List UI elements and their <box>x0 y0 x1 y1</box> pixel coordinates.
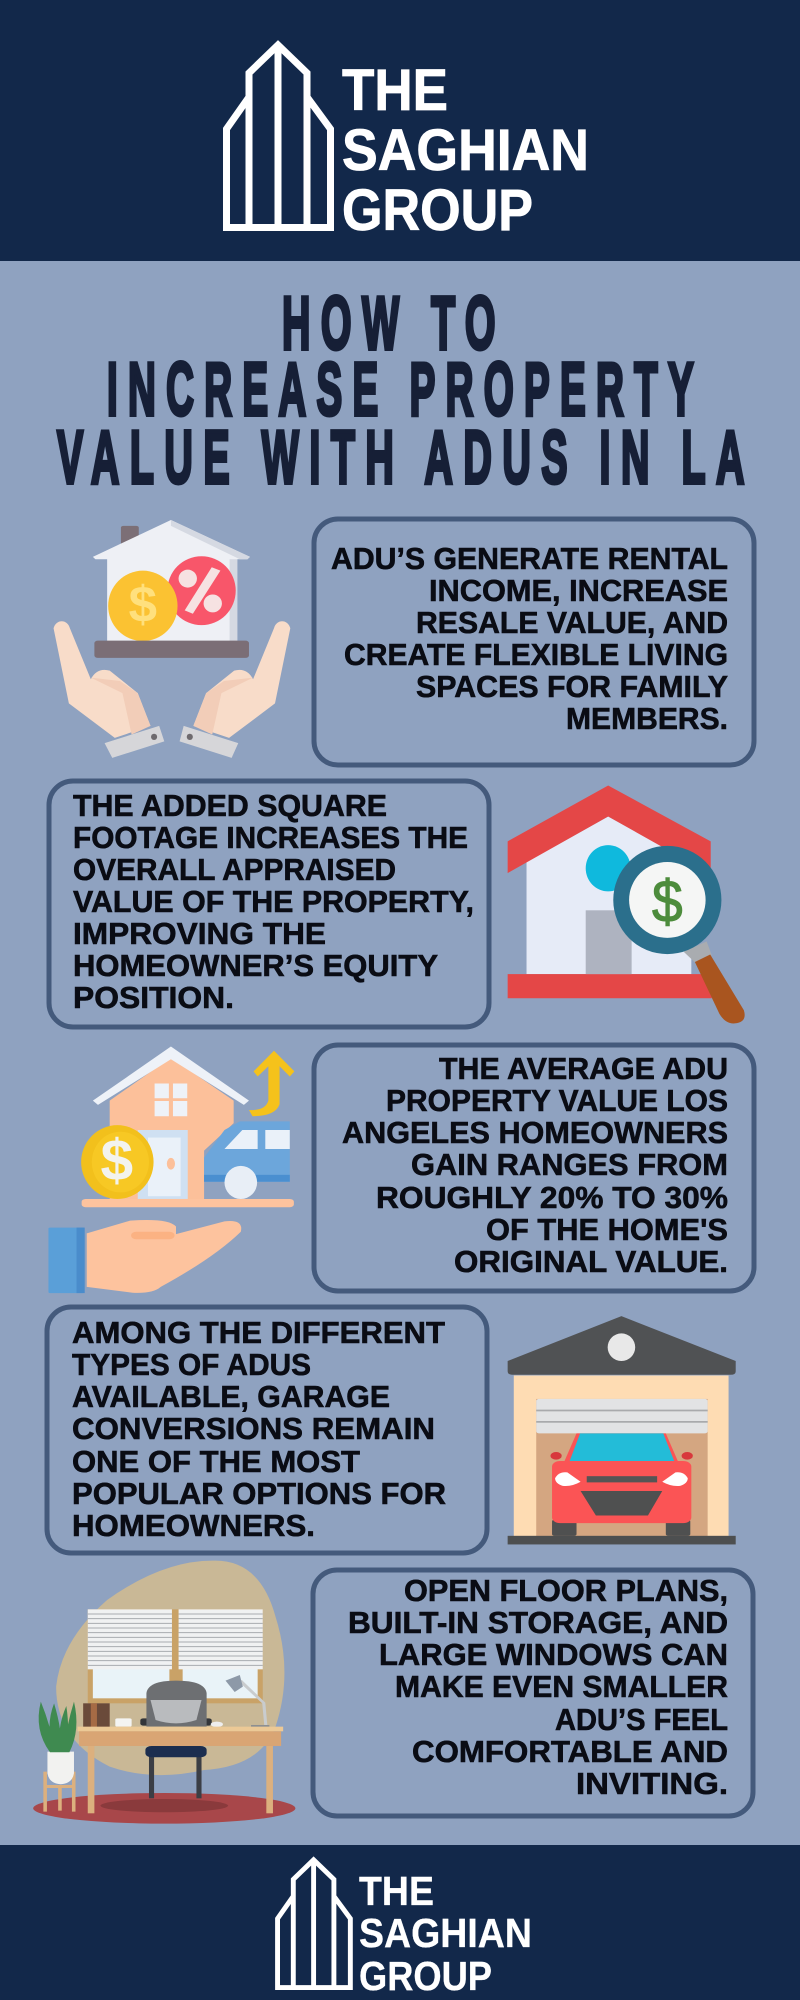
footer wordmark: GROUP <box>359 1953 492 1999</box>
header band with logo <box>0 0 800 261</box>
panel: rental income: MEMBERS. <box>566 702 728 736</box>
footer wordmark <box>359 1868 532 1999</box>
panel: rental income: ADU’S GENERATE RENTAL <box>331 542 728 576</box>
panel: open floor plans: BUILT-IN STORAGE, AND <box>348 1606 728 1640</box>
panel: appraised value <box>49 781 489 1027</box>
panel: open floor plans: OPEN FLOOR PLANS, <box>404 1574 728 1608</box>
panel: garage conversions: POPULAR OPTIONS FOR <box>72 1477 446 1511</box>
panel: average value gain: PROPERTY VALUE LOS <box>386 1084 728 1118</box>
panel: appraised value: OVERALL APPRAISED <box>73 853 396 887</box>
panel: garage conversions: AVAILABLE, GARAGE <box>72 1380 390 1414</box>
icon: garage with red car <box>508 1316 736 1544</box>
icon: house with coins held by hands <box>54 520 290 758</box>
logo wordmark: THE <box>342 58 448 123</box>
logo wordmark <box>342 58 589 243</box>
panel: garage conversions <box>47 1307 487 1553</box>
panel: rental income: RESALE VALUE, AND <box>416 606 728 640</box>
panel: average value gain: ROUGHLY 20% TO 30% <box>376 1181 728 1215</box>
panel: appraised value: VALUE OF THE PROPERTY, <box>73 885 474 919</box>
panel: garage conversions: TYPES OF ADUS <box>72 1348 311 1382</box>
icon: hand holding house, car and coin <box>48 1047 294 1293</box>
panel: average value gain: THE AVERAGE ADU <box>439 1052 728 1086</box>
panel: average value gain: ANGELES HOMEOWNERS <box>342 1116 728 1150</box>
panel: garage conversions: ONE OF THE MOST <box>72 1445 360 1479</box>
panel: appraised value: POSITION. <box>73 981 234 1015</box>
panel: appraised value: HOMEOWNER’S EQUITY <box>73 949 438 983</box>
panel: rental income: CREATE FLEXIBLE LIVING <box>344 638 728 672</box>
icon: house with coins held by hands: $ <box>129 575 157 632</box>
icon: house with magnifier and dollar <box>508 785 745 1023</box>
panel: average value gain: GAIN RANGES FROM <box>411 1148 728 1182</box>
title <box>57 281 755 499</box>
panel: appraised value: FOOTAGE INCREASES THE <box>73 821 468 855</box>
panel: open floor plans: INVITING. <box>576 1767 728 1801</box>
icon: hand holding house, car and coin: $ <box>101 1128 133 1193</box>
panel: rental income: SPACES FOR FAMILY <box>416 670 728 704</box>
panel: garage conversions: HOMEOWNERS. <box>72 1509 315 1543</box>
panel: average value gain: OF THE HOME'S <box>486 1213 728 1247</box>
title: HOW TO <box>282 281 506 365</box>
panel: appraised value: THE ADDED SQUARE <box>73 789 387 823</box>
panel: rental income: INCOME, INCREASE <box>429 574 728 608</box>
panel: open floor plans <box>313 1570 753 1816</box>
logo wordmark: GROUP <box>342 178 533 243</box>
icon: house with magnifier and dollar: $ <box>652 868 683 935</box>
panel: open floor plans: MAKE EVEN SMALLER <box>395 1670 728 1704</box>
icon: skyscraper logo small <box>278 1860 350 1988</box>
panel: garage conversions: CONVERSIONS REMAIN <box>72 1412 435 1446</box>
panel: open floor plans: LARGE WINDOWS CAN <box>379 1638 728 1672</box>
panel: average value gain <box>314 1045 754 1291</box>
panel: garage conversions: AMONG THE DIFFERENT <box>72 1316 445 1350</box>
footer wordmark: SAGHIAN <box>359 1910 532 1956</box>
footer wordmark: THE <box>359 1868 434 1914</box>
logo wordmark: SAGHIAN <box>342 118 589 183</box>
panel: appraised value: IMPROVING THE <box>73 917 326 951</box>
panel: rental income <box>314 519 754 765</box>
icon: skyscraper logo <box>226 45 330 228</box>
panel: average value gain: ORIGINAL VALUE. <box>454 1245 728 1279</box>
icon: home office desk scene <box>33 1561 295 1824</box>
footer band with logo <box>0 1845 800 2000</box>
panel: open floor plans: ADU’S FEEL <box>555 1703 728 1737</box>
panel: open floor plans: COMFORTABLE AND <box>412 1735 728 1769</box>
